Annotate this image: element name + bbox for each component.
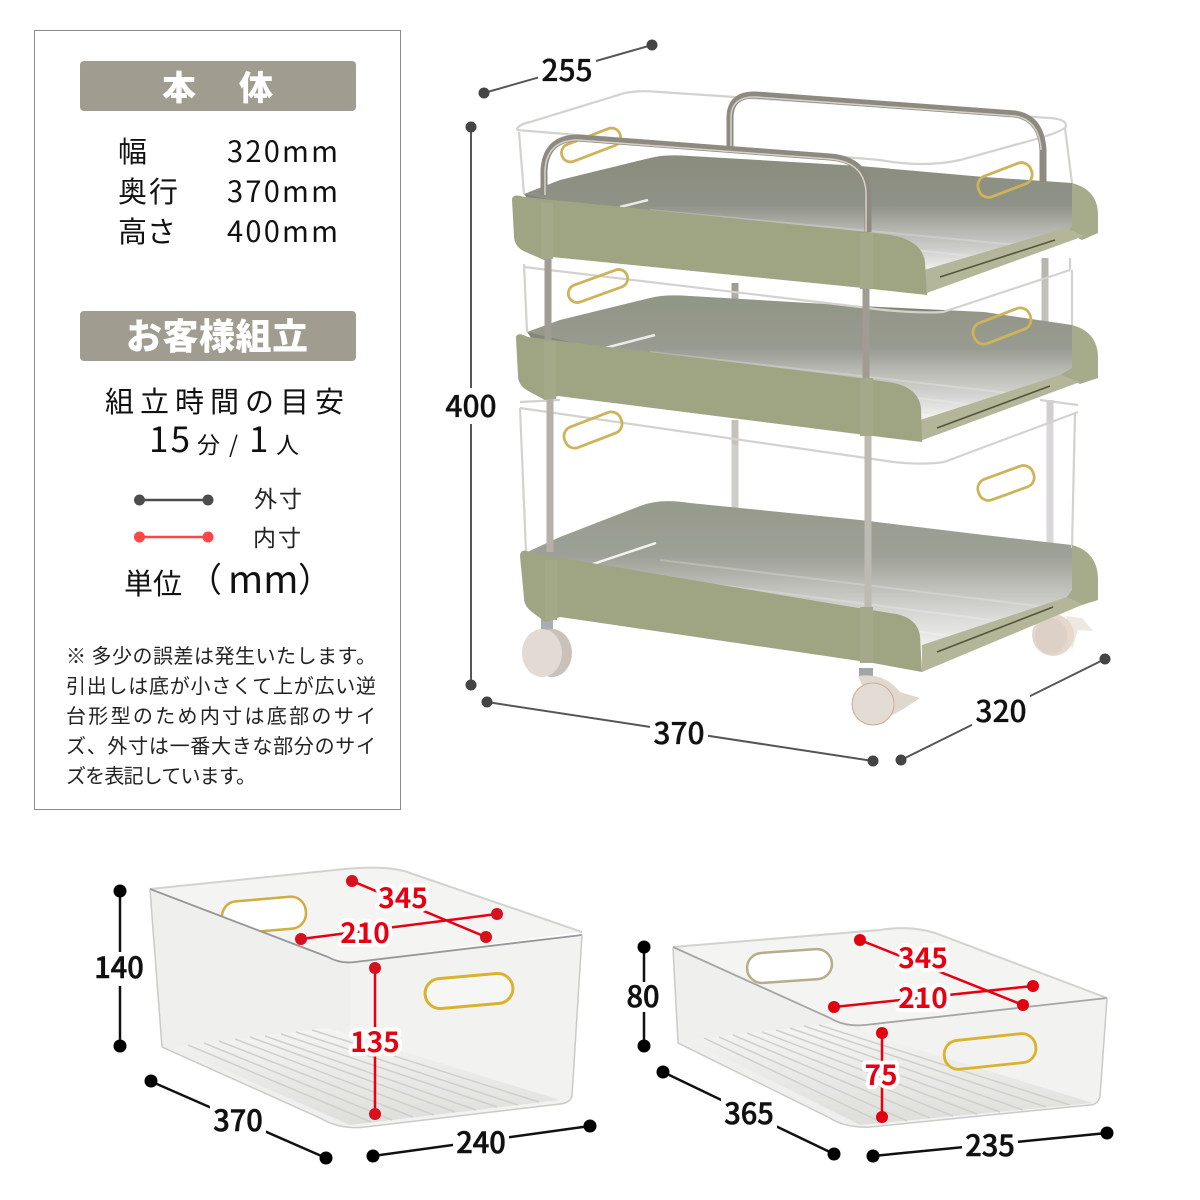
product: three-tier trolley [512, 91, 1098, 725]
tier 2 rods [548, 240, 866, 385]
tier 3 clear bin [520, 400, 1078, 655]
dimensions: tall bin outer: 370 [213, 1098, 263, 1140]
text block: body dimensions: 奥行 [118, 169, 178, 211]
front arch handle [544, 138, 868, 232]
product: tall clear bin [150, 868, 582, 1128]
text block: note: 台形型のため内寸は底部のサイ [66, 700, 376, 729]
dimensions: tall bin outer: 240 [456, 1120, 506, 1162]
bin handle left [221, 895, 307, 935]
tier 3 tray [520, 545, 1098, 672]
legend: outer dimension [134, 480, 302, 514]
dimensions: tall bin inner: 345 [378, 877, 428, 917]
dimensions: tall bin outer: 140 [94, 945, 144, 987]
dimension: depth 255: 255 [541, 46, 593, 90]
dimensions: tall bin inner: 210 [340, 912, 390, 952]
text: unit mm [188, 549, 332, 604]
bin left wall [150, 890, 350, 1128]
text: unit: 単位 [124, 561, 182, 603]
dimensions: shallow bin inner: 75 [864, 1054, 898, 1094]
text block: body dimensions: 幅 [118, 129, 147, 171]
tier 2 clear bin [524, 258, 1072, 425]
bin left wall [673, 948, 860, 1127]
dimension: width 320 [896, 654, 1110, 766]
text block: body dimensions: 320mm [227, 129, 338, 171]
bin handle right [943, 1032, 1037, 1071]
text block: assembly time [105, 379, 344, 463]
caster front right [852, 668, 920, 725]
text block: body dimensions: 400mm [227, 209, 338, 251]
dimensions: shallow bin outer: 365 [724, 1091, 774, 1133]
text block: body dimensions: 370mm [227, 169, 338, 211]
bin floor stripes [173, 1028, 560, 1125]
text block: body dimensions: 高さ [118, 209, 176, 251]
tier 2 tray floor [527, 295, 1072, 422]
dimension: width 320: 320 [975, 687, 1027, 731]
dimensions: shallow bin inner: 210 [898, 977, 948, 1017]
text block: note: ズ、外寸は一番大きな部分のサイ [66, 730, 376, 759]
dimension: depth 370: 370 [653, 709, 705, 753]
tier 1 tray [512, 183, 1098, 295]
bin handle right [424, 972, 514, 1010]
legend: inner dimension [134, 519, 301, 553]
caster rear right [1032, 614, 1093, 656]
tier 3 rods [550, 385, 868, 612]
bin handle left [746, 948, 833, 984]
text: unit mm: （ [188, 553, 222, 602]
back arch handle [730, 95, 1043, 182]
dimensions: shallow bin outer [622, 940, 1114, 1165]
legend: inner dimension: 内寸 [253, 519, 301, 553]
heading: main body: 本 [162, 61, 196, 110]
text block: assembly time: / [229, 426, 238, 460]
tier 2 tray [516, 325, 1098, 442]
text block: assembly time: 人 [276, 426, 299, 460]
dimensions: tall bin inner [295, 875, 503, 1120]
dimension: depth 255 [478, 40, 658, 98]
dimensions: shallow bin inner: 345 [898, 937, 948, 977]
text: unit mm: ） [298, 553, 332, 602]
tier 1 tray floor [524, 155, 1072, 275]
tier 3 tray floor [525, 501, 1072, 650]
text block: assembly time: 1 [249, 412, 268, 463]
dimension: height 400 [442, 122, 500, 690]
back rods [735, 258, 1050, 545]
heading: customer assembly: お客様組立 [126, 308, 308, 360]
text block: body dimensions [118, 129, 338, 251]
legend: outer dimension: 外寸 [254, 480, 302, 514]
panel: specifications [34, 30, 400, 810]
heading: main body: 体 [239, 61, 273, 110]
text block: assembly time: 15 [149, 412, 190, 463]
text block: note: 引出しは底が小さくて上が広い逆 [66, 670, 376, 699]
heading: customer assembly [80, 308, 356, 361]
caster front left [522, 618, 572, 677]
product: shallow clear bin [673, 928, 1107, 1127]
dimensions: shallow bin outer: 80 [626, 974, 660, 1016]
dimension: depth 370 [482, 696, 878, 766]
text block: assembly time: 組立時間の目安 [105, 379, 344, 421]
dimensions: shallow bin inner [828, 934, 1039, 1123]
text block: note: ※ 多少の誤差は発生いたします。 [66, 640, 376, 669]
dimensions: tall bin outer [92, 884, 596, 1164]
tier 1 clear bin [517, 91, 1072, 280]
text block: note: ズを表記しています。 [66, 760, 256, 789]
dimensions: shallow bin outer: 235 [965, 1123, 1015, 1165]
text block: note [66, 640, 376, 789]
text block: assembly time: 分 [197, 426, 220, 460]
dimensions: tall bin inner: 135 [350, 1021, 400, 1061]
bin floor stripes [690, 1023, 1093, 1125]
dimension: height 400: 400 [445, 382, 497, 426]
text: unit mm: mm [228, 549, 298, 604]
heading: main body [80, 61, 356, 111]
